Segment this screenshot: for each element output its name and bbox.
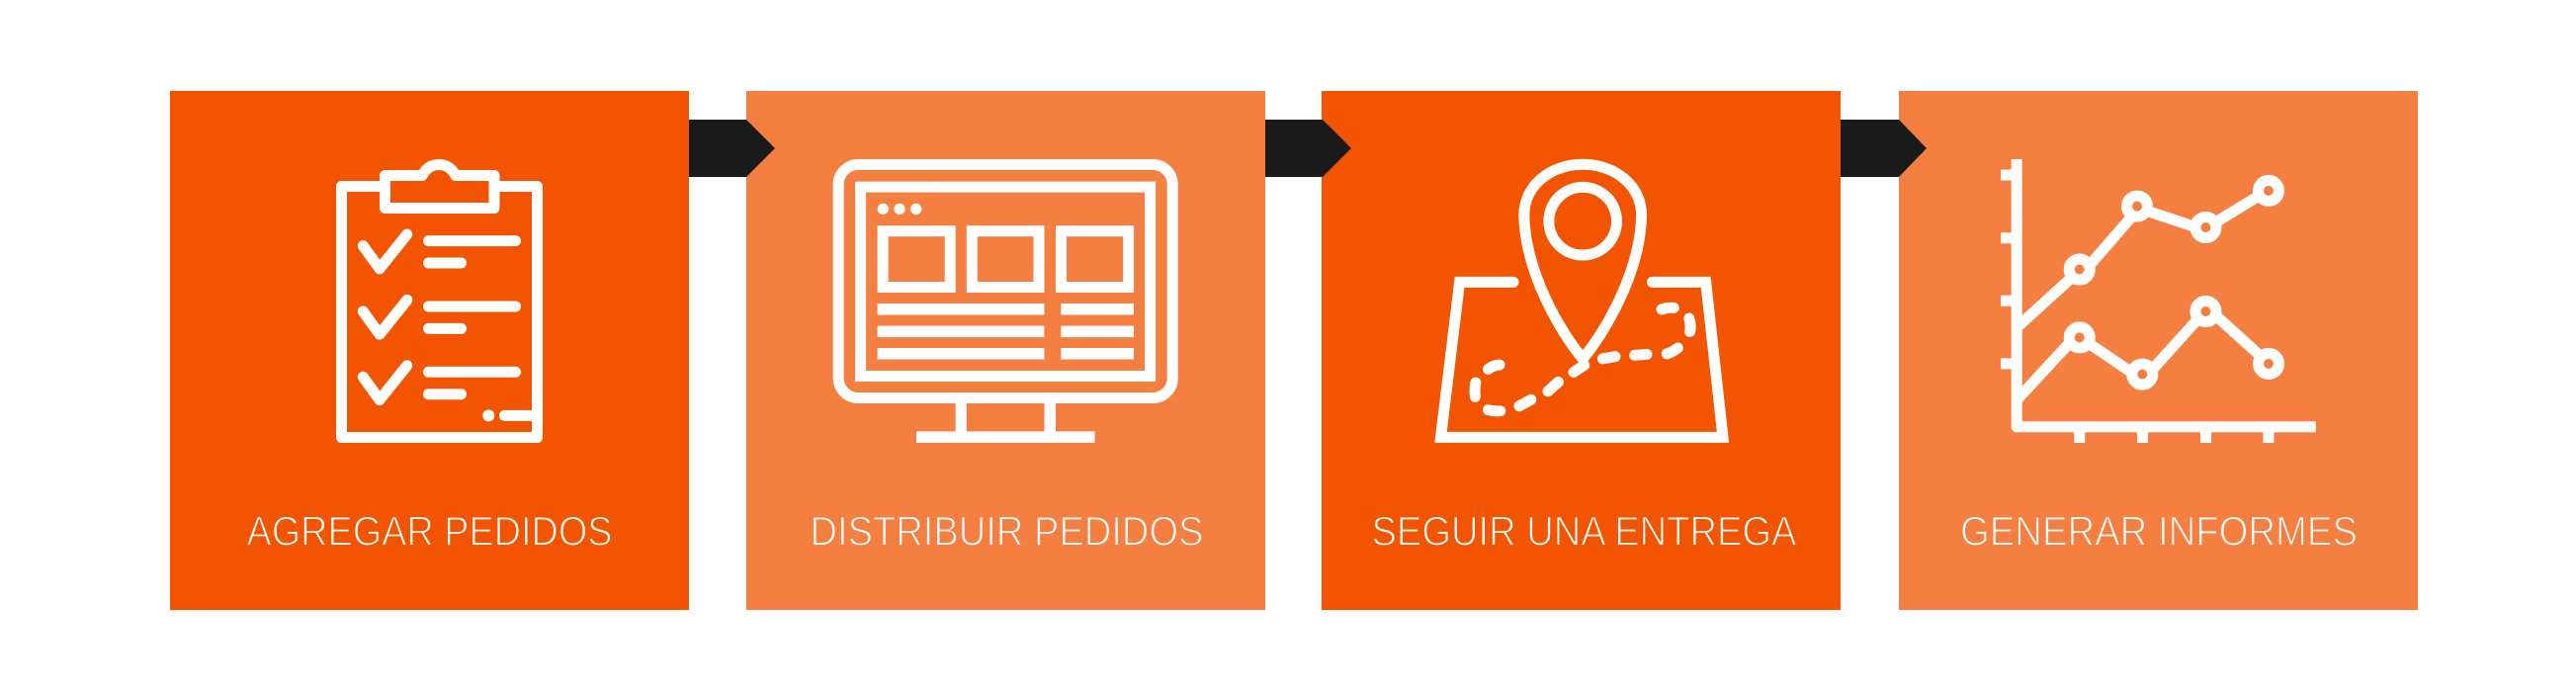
panel: distribuir pedidos [746,91,1265,610]
icon: line chart [2001,159,2316,443]
arrow: step 2 to step 3 [1265,120,1351,177]
icon: map with location pin [1441,164,1723,437]
icon: computer monitor [838,164,1172,443]
panel: agregar pedidos [170,91,689,610]
label: generar informes: GENERAR INFORMES [1960,508,2358,554]
panel: generar informes [1899,91,2418,610]
label: agregar pedidos: AGREGAR PEDIDOS [247,508,613,554]
arrow: step 1 to step 2 [689,120,775,177]
label: distribuir pedidos: DISTRIBUIR PEDIDOS [811,508,1204,554]
panel: seguir una entrega [1322,91,1841,610]
label: seguir una entrega: SEGUIR UNA ENTREGA [1372,508,1797,554]
icon: clipboard checklist [342,164,538,437]
arrow: step 3 to step 4 [1841,120,1927,177]
